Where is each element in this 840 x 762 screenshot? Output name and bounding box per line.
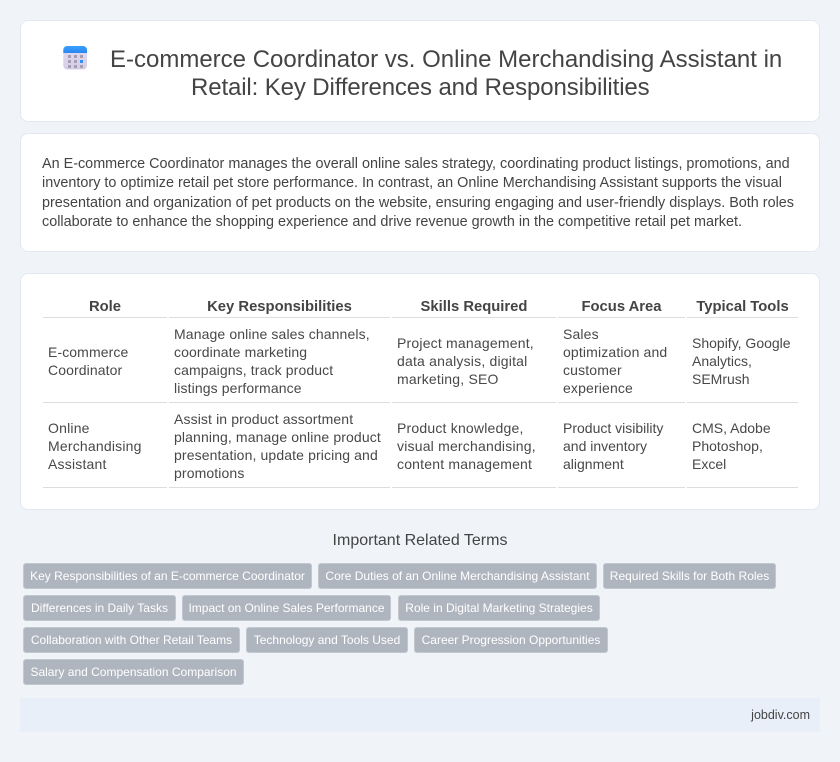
row: E-commerce Coordinator: Manage online sales channels,: [174, 326, 370, 342]
related terms heading: Important Related Terms: [333, 532, 507, 549]
chip: [23, 563, 312, 589]
row: Online Merchandising Assistant: Assist in product assortment: [174, 411, 353, 427]
table header: Role: [89, 299, 121, 315]
intro panel: [20, 133, 820, 252]
row: Online Merchandising Assistant: Assistant: [48, 456, 107, 472]
row: E-commerce Coordinator: Sales: [563, 326, 599, 342]
row: E-commerce Coordinator: optimization and: [563, 344, 667, 360]
chip: Collaboration with Other Retail Teams: [31, 633, 232, 647]
row: E-commerce Coordinator: Shopify, Google: [692, 335, 791, 351]
footer bar: [20, 698, 820, 732]
row: Online Merchandising Assistant: Online: [48, 420, 90, 436]
row: Online Merchandising Assistant: alignment: [563, 456, 624, 472]
table header: Key Responsibilities: [207, 299, 352, 315]
table: [43, 299, 798, 488]
row: E-commerce Coordinator: listings performance: [174, 380, 302, 396]
footer source: jobdiv.com: [751, 708, 810, 722]
row: E-commerce Coordinator: customer: [563, 362, 622, 378]
chip: [23, 627, 240, 653]
row: E-commerce Coordinator: Analytics,: [692, 353, 752, 369]
chip: [246, 627, 408, 653]
chip: [23, 659, 244, 685]
intro text: collaborate to enhance the shopping experience and drive revenue growth in the competitive retail pet market.: [42, 214, 742, 230]
chip: Differences in Daily Tasks: [31, 601, 168, 615]
row: Online Merchandising Assistant: promotions: [174, 465, 244, 481]
row: E-commerce Coordinator: E-commerce: [48, 344, 128, 360]
table header: Typical Tools: [696, 299, 789, 315]
icon: calendar: [63, 46, 87, 70]
table header: Focus Area: [581, 299, 662, 315]
chip: Core Duties of an Online Merchandising Assistant: [325, 569, 590, 583]
chip: [414, 627, 608, 653]
row: Online Merchandising Assistant: CMS, Adobe: [692, 420, 771, 436]
row: Online Merchandising Assistant: Photoshop,: [692, 438, 763, 454]
related terms chips: [23, 563, 776, 685]
row: E-commerce Coordinator: data analysis, digital: [397, 353, 527, 369]
title: Retail: Key Differences and Responsibilities: [191, 74, 650, 101]
row: E-commerce Coordinator: SEMrush: [692, 371, 750, 387]
chip: [23, 595, 176, 621]
row: E-commerce Coordinator: coordinate marketing: [174, 344, 307, 360]
header card: [20, 20, 820, 122]
title: E-commerce Coordinator vs. Online Merchandising Assistant in: [110, 46, 782, 73]
row: Online Merchandising Assistant: Product knowledge,: [397, 420, 524, 436]
row: E-commerce Coordinator: Coordinator: [48, 362, 122, 378]
row: E-commerce Coordinator: campaigns, track product: [174, 362, 333, 378]
chip: Technology and Tools Used: [254, 633, 400, 647]
chip: [398, 595, 600, 621]
row: E-commerce Coordinator: Project management,: [397, 335, 534, 351]
chip: [603, 563, 776, 589]
intro text: inventory to optimize retail pet store performance. In contrast, an Online Merchandising Assistant supports the visual: [42, 175, 782, 191]
intro text: [42, 156, 794, 230]
chip: Salary and Compensation Comparison: [30, 665, 237, 679]
row: Online Merchandising Assistant: planning, manage online product: [174, 429, 381, 445]
intro text: presentation and organization of pet products on the website, ensuring engaging and user-friendly displays. Both roles: [42, 195, 794, 211]
row: Online Merchandising Assistant: Product visibility: [563, 420, 663, 436]
row: Online Merchandising Assistant: Merchandising: [48, 438, 142, 454]
row: Online Merchandising Assistant: visual merchandising,: [397, 438, 536, 454]
row: Online Merchandising Assistant: content management: [397, 456, 532, 472]
row: E-commerce Coordinator: marketing, SEO: [397, 371, 499, 387]
chip: Required Skills for Both Roles: [610, 569, 769, 583]
row: Online Merchandising Assistant: Excel: [692, 456, 726, 472]
chip: Career Progression Opportunities: [422, 633, 600, 647]
row: E-commerce Coordinator: [48, 326, 791, 396]
chip: Role in Digital Marketing Strategies: [405, 601, 593, 615]
table header: [89, 299, 789, 315]
chip: [318, 563, 597, 589]
row: Online Merchandising Assistant: presentation, update pricing and: [174, 447, 378, 463]
table panel: [20, 273, 820, 510]
title: [110, 46, 782, 101]
table header: Skills Required: [421, 299, 527, 315]
row: Online Merchandising Assistant: [48, 411, 771, 481]
chip: [182, 595, 391, 621]
chip: Key Responsibilities of an E-commerce Coordinator: [30, 569, 305, 583]
chip: Impact on Online Sales Performance: [188, 601, 385, 615]
row: Online Merchandising Assistant: and inventory: [563, 438, 647, 454]
intro text: An E-commerce Coordinator manages the overall online sales strategy, coordinating product listings, promotions, and: [42, 156, 790, 172]
row: E-commerce Coordinator: experience: [563, 380, 633, 396]
